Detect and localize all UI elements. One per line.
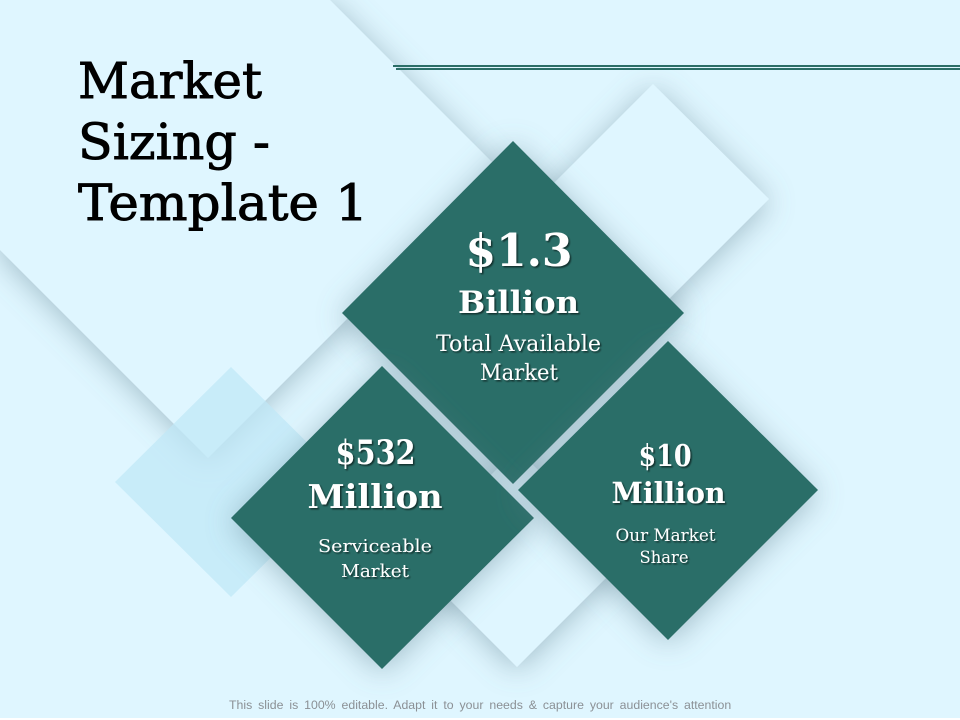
panel: our market share bbox=[518, 341, 818, 640]
large background diamond bbox=[0, 0, 498, 458]
label: our market share: Our Market bbox=[616, 526, 716, 546]
label: our market share bbox=[616, 526, 716, 568]
panel: total available market bbox=[342, 141, 684, 484]
light diamond upper right bbox=[538, 84, 769, 315]
title bbox=[78, 52, 368, 232]
pale blue diamond lower left bbox=[115, 367, 347, 597]
value: $1.3 Billion: Billion bbox=[458, 285, 579, 321]
title: Market bbox=[78, 52, 262, 110]
title: Template 1 bbox=[78, 174, 368, 232]
value: $1.3 Billion bbox=[458, 224, 579, 321]
light diamond lower centre bbox=[408, 449, 626, 667]
value: $10 Million: $10 bbox=[638, 439, 692, 474]
value: $10 Million: Million bbox=[612, 476, 726, 510]
footer note: This slide is 100% editable. Adapt it to your needs & capture your audience's attention bbox=[229, 698, 731, 712]
label: our market share: Share bbox=[640, 548, 688, 568]
label: serviceable market: Market bbox=[341, 561, 410, 582]
value: $532 Million: Million bbox=[308, 477, 442, 516]
label: total available market: Market bbox=[480, 361, 558, 386]
label: serviceable market: Serviceable bbox=[318, 536, 432, 557]
value: $532 Million: $532 bbox=[336, 433, 416, 473]
value: $532 Million bbox=[308, 433, 442, 516]
label: total available market: Total Available bbox=[436, 332, 601, 357]
label: total available market bbox=[436, 332, 601, 386]
label: serviceable market bbox=[318, 536, 432, 582]
value: $10 Million bbox=[612, 439, 726, 510]
title: Sizing - bbox=[78, 113, 270, 171]
panel: serviceable market bbox=[231, 366, 534, 669]
header double rule bbox=[393, 65, 960, 70]
value: $1.3 Billion: $1.3 bbox=[466, 224, 572, 277]
